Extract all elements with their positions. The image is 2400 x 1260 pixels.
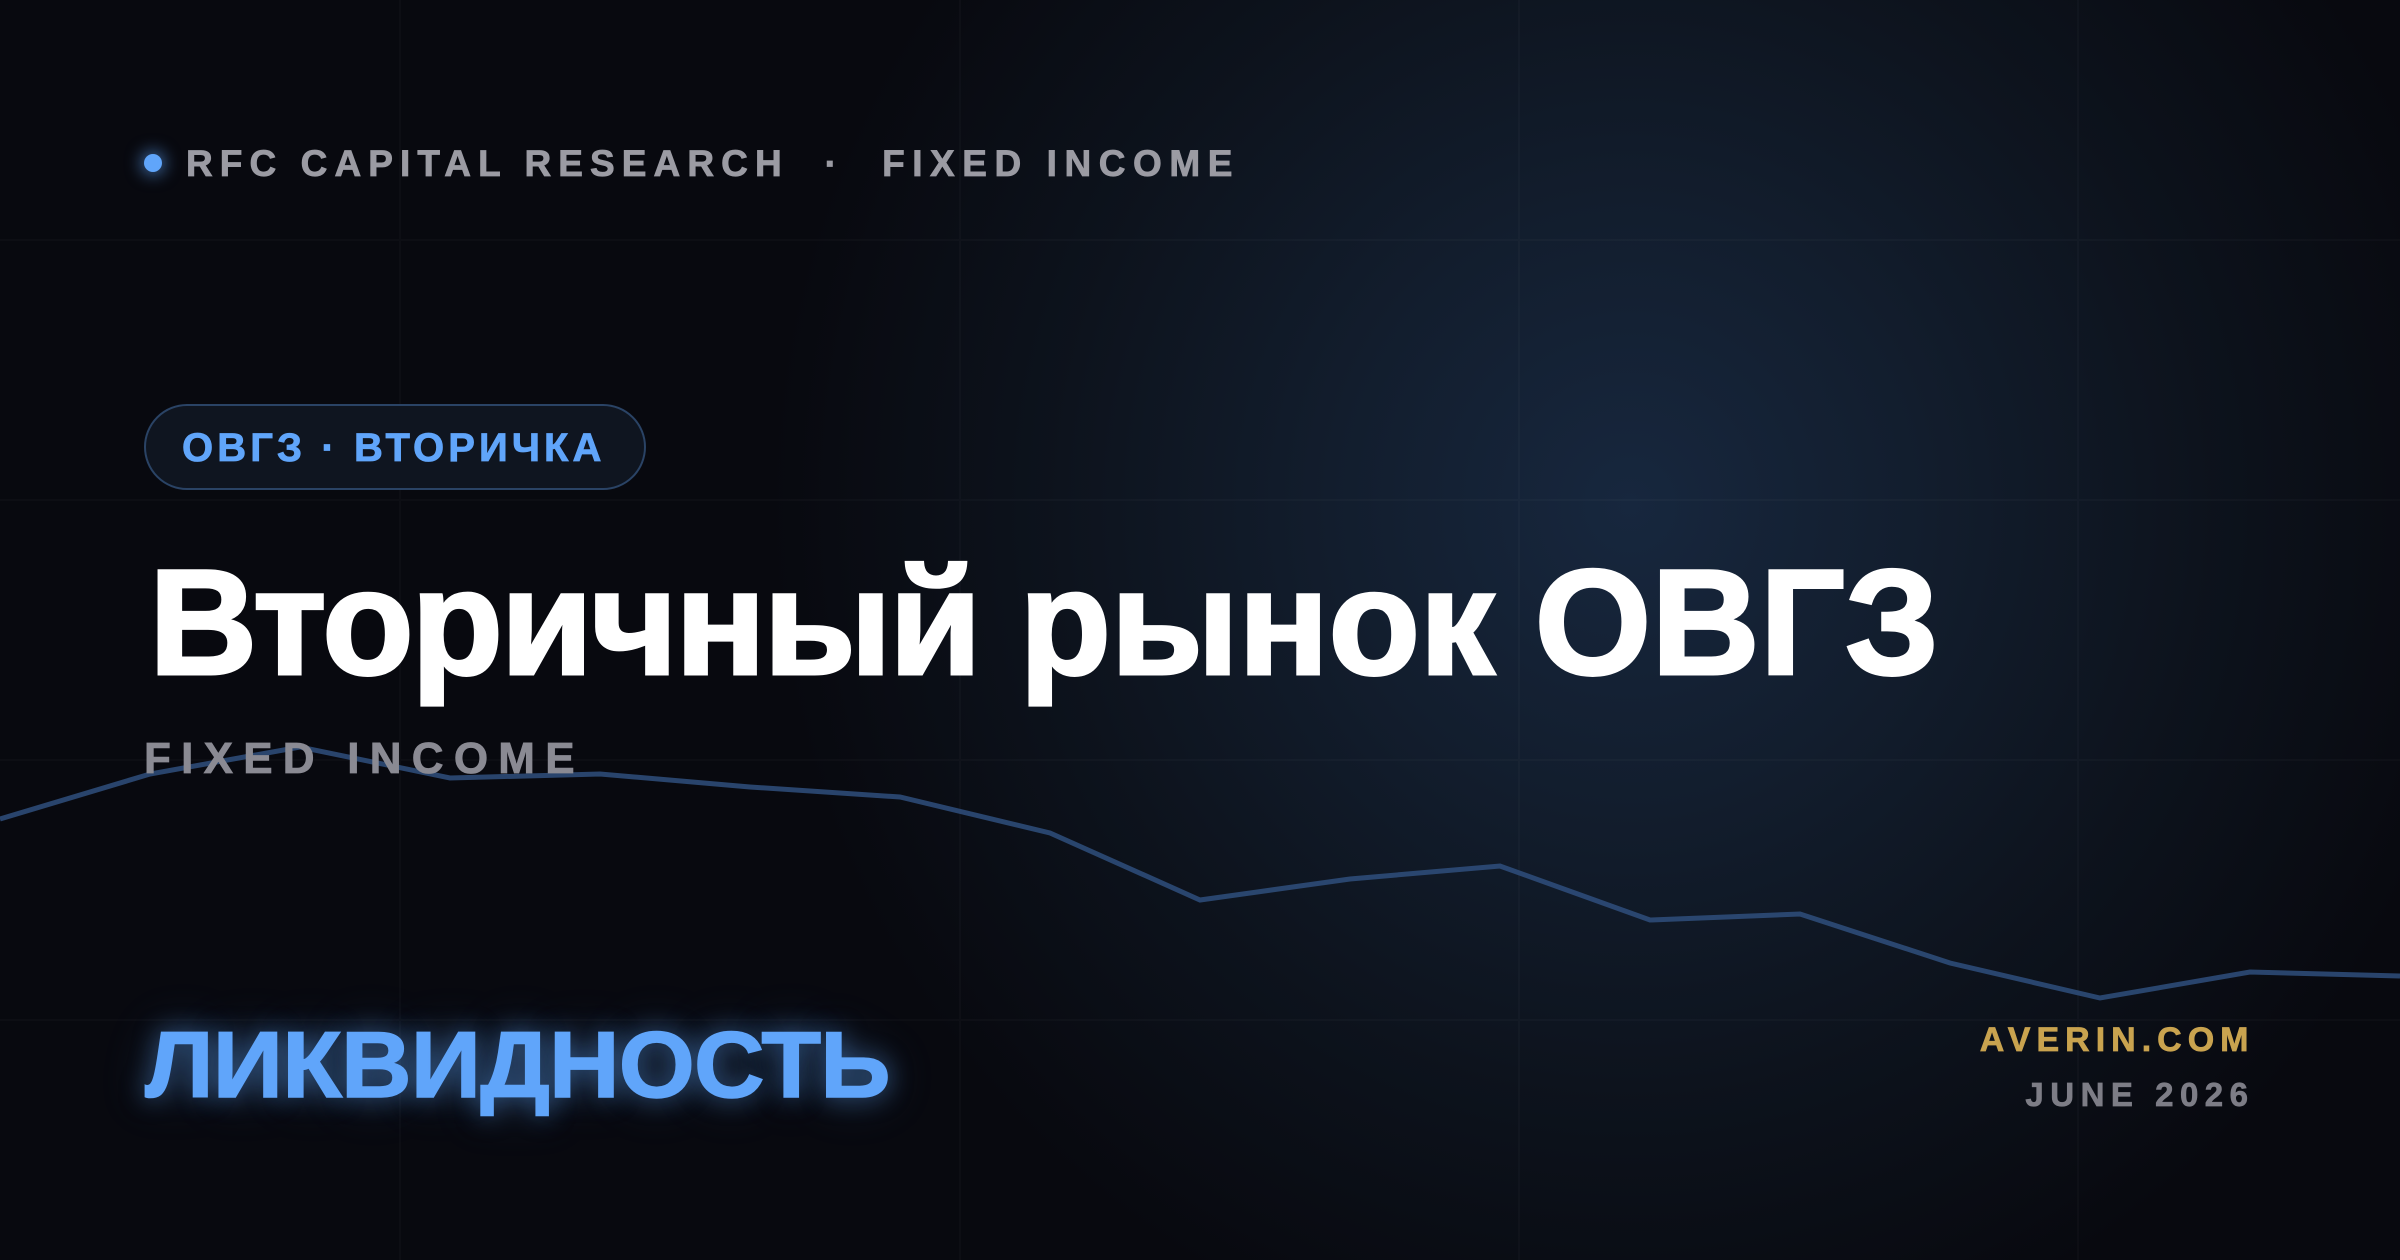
icon: status dot [144,154,162,172]
category pill [144,404,646,490]
website: AVERIN.COM [1980,1021,2254,1059]
subtitle: FIXED INCOME [144,734,585,783]
header text: RFC CAPITAL RESEARCH · FIXED INCOME [186,143,1240,184]
title: Вторичный рынок ОВГЗ [149,538,1939,706]
source block [1980,1021,2254,1113]
line chart [0,747,2400,998]
topic label: ЛИКВИДНОСТЬ [145,1012,890,1117]
header [132,142,1240,184]
date: JUNE 2026 [2025,1076,2254,1113]
pill label: ОВГЗ · ВТОРИЧКА [182,426,606,470]
